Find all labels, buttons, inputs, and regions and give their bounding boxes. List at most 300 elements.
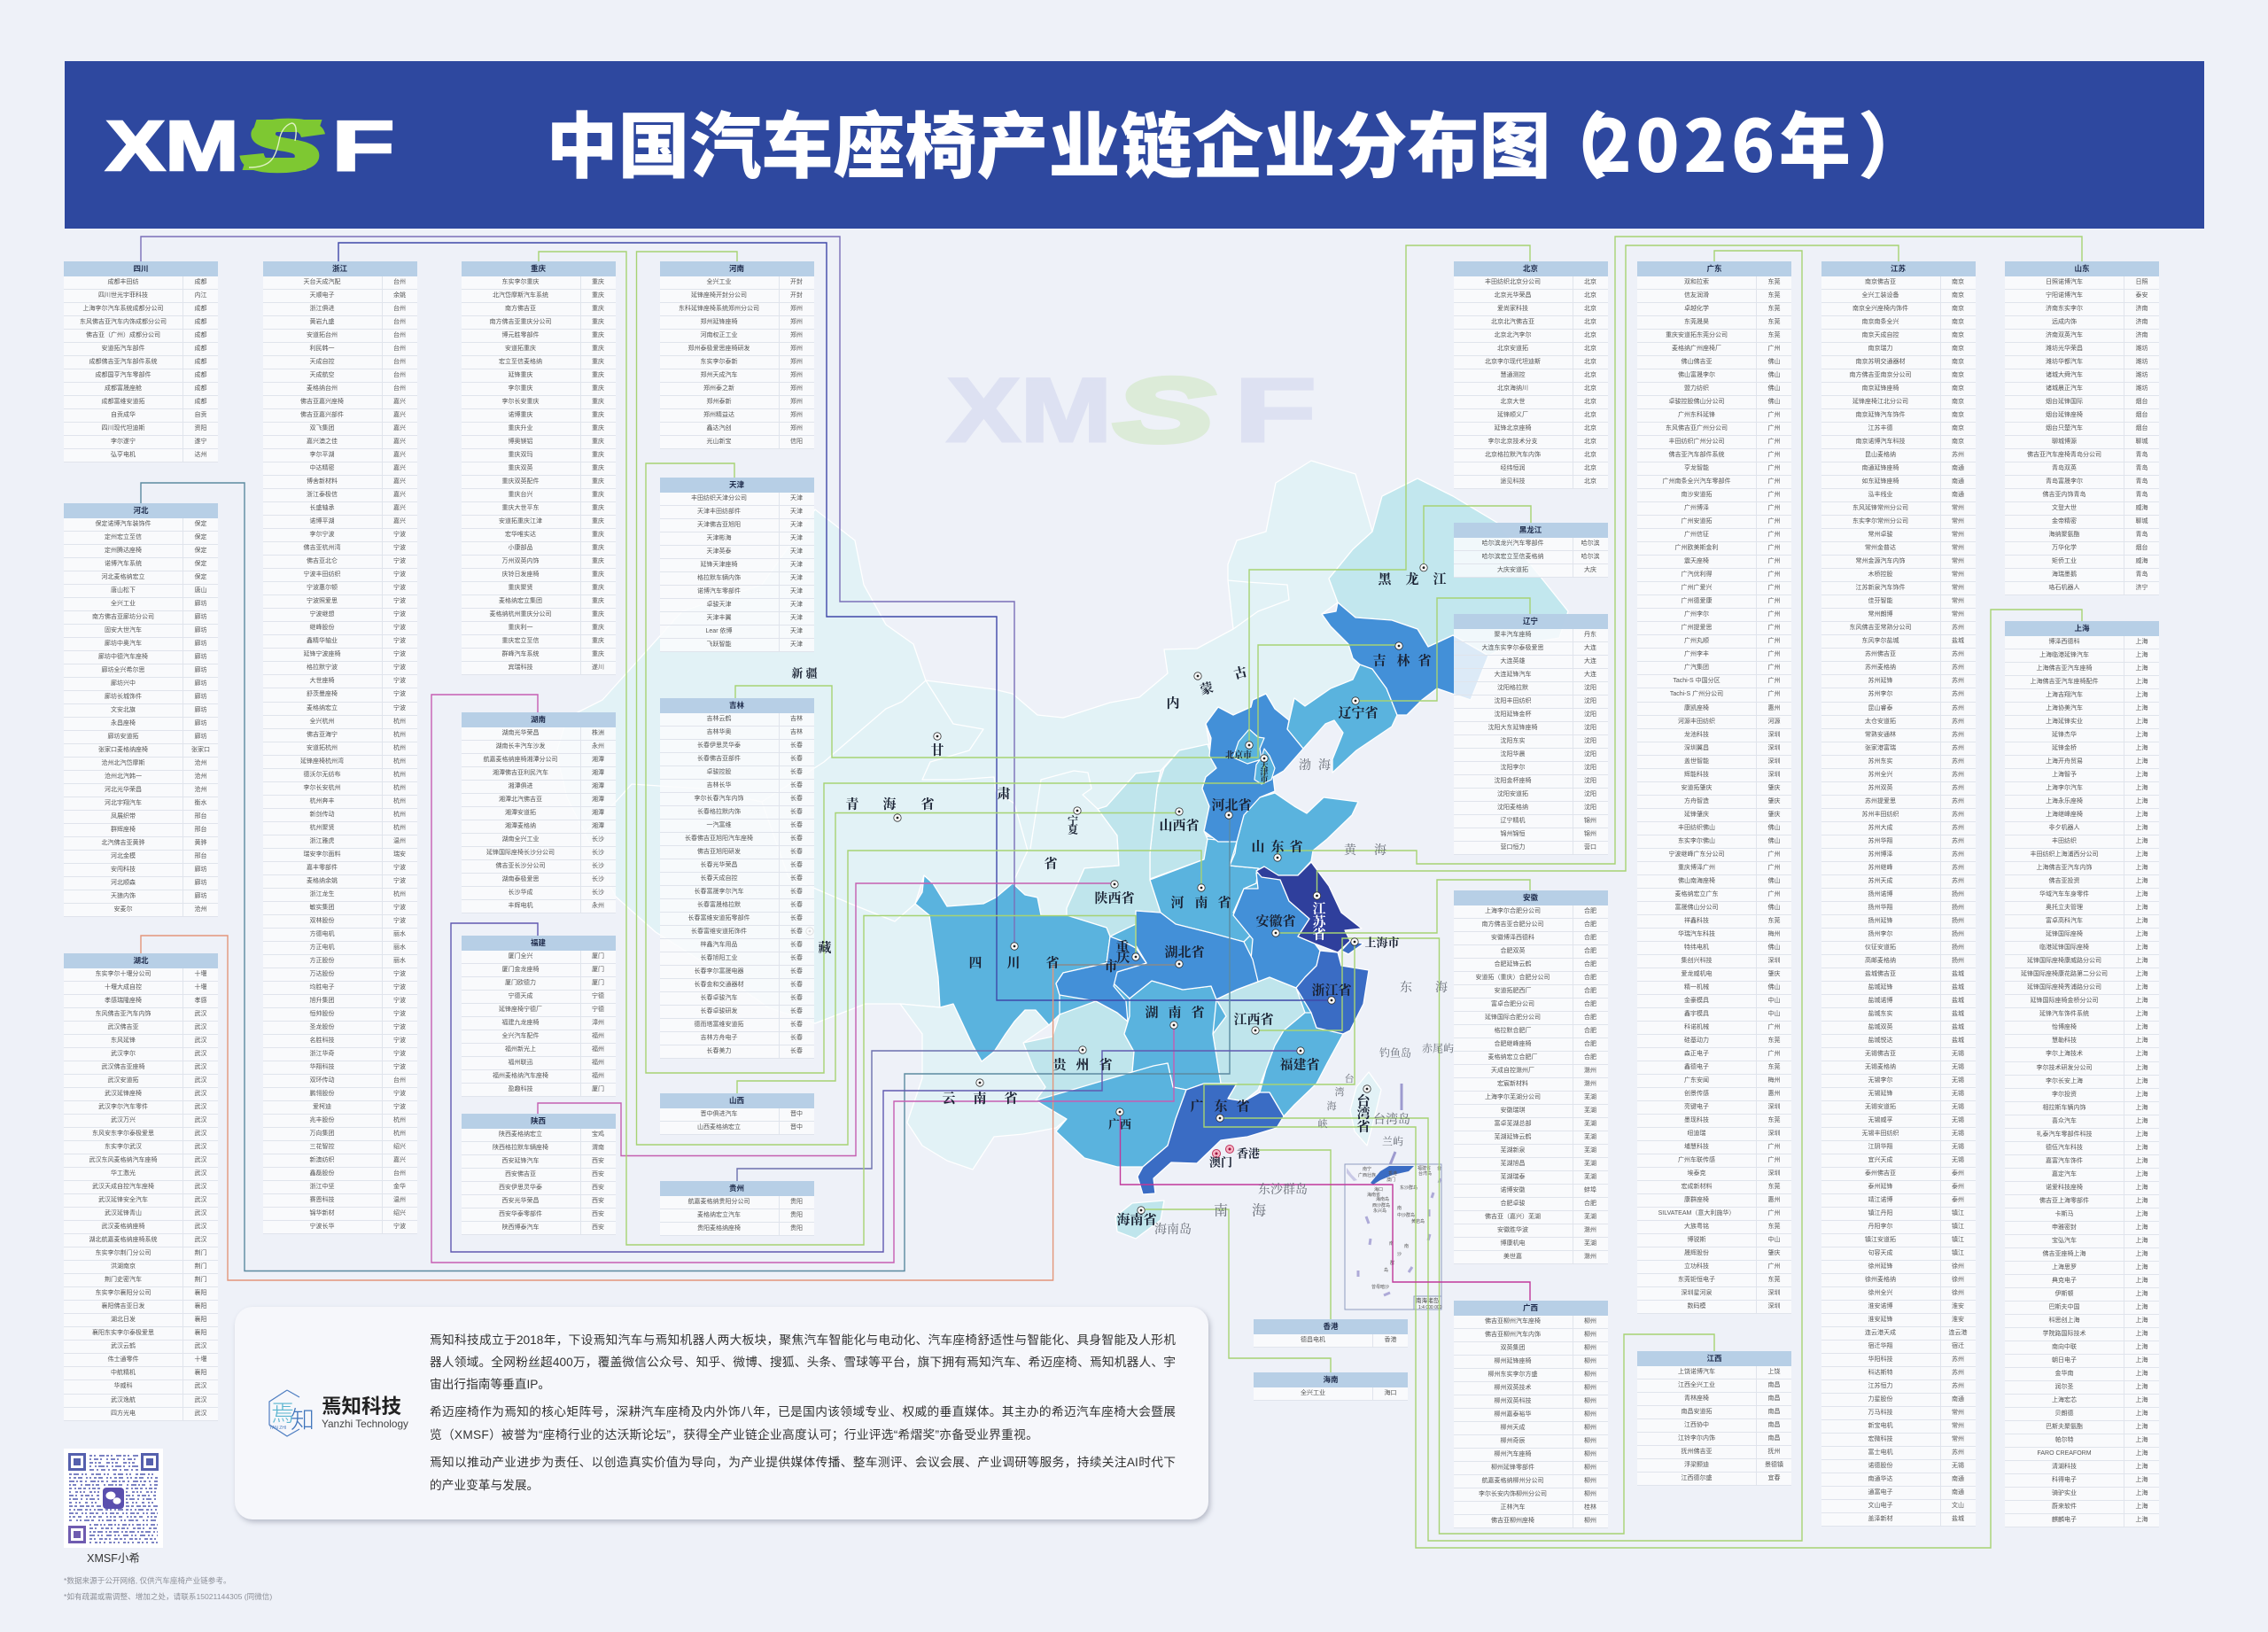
table: Zhejiang: 台州 [393,332,406,338]
table: Jilin: 吉林 [790,716,803,722]
table: Shandong: 潍坊 [2135,385,2148,392]
table: Hebei: 全兴工业 [111,601,136,607]
table: Hubei: 湖北日发 [111,1317,136,1323]
table: Tianjin: 天津 [790,535,803,541]
table: Hebei: 邢台 [195,827,207,833]
table: Beijing: 北京北汽李尔 [1494,332,1531,338]
table: Zhejiang: 杭州 [393,719,406,725]
table: Zhejiang: 杭州 [393,758,406,765]
table: Jiangsu: 佳芬智能 [1868,598,1892,604]
table: Anhui: 合肥 [1584,1014,1596,1021]
table: Guangdong: 佛山 [1768,825,1781,831]
connector: Zhejiang [338,243,1332,1000]
table: Tianjin: 天津 [790,602,803,608]
table: Zhejiang: 万达股份 [310,971,335,977]
table: Chongqing: 重庆 [592,439,604,445]
table: Hubei: 东风安东李尔泰极爱思 [92,1131,154,1137]
table: Jiangsu: 苏州 [1952,865,1964,871]
table: Shanghai: 巴斯夫中国 [2048,1304,2080,1310]
table: Jiangsu: 南京 [1952,332,1964,338]
table: Zhejiang: 宁波 [393,664,406,671]
table: Hubei: 东风佛吉亚汽车内饰 [96,1011,151,1017]
table: Liaoning: 沈阳金杯座椅 [1494,778,1531,784]
table: Chongqing: 宾瑞科技 [509,664,533,671]
table: Fujian: 厦门 [592,953,604,960]
table: Tianjin: 天津佛吉亚旭阳 [697,522,741,528]
table: Zhejiang: 三花智控 [310,1144,335,1150]
sea and island labels: 湾 [1334,1084,1345,1099]
table: Anhui: 合肥延锋云鹤 [1494,961,1531,968]
table: Shandong: 诸城大舜汽车 [2046,372,2083,378]
connector: Jiangxi [1255,938,1714,1534]
table: Jiangsu: 常州 [1952,585,1964,591]
table: Beijing: 北京 [1584,478,1596,485]
table: Guangdong: 麦格纳宏立广东 [1674,891,1719,898]
sea and island labels: 台 [1345,1071,1354,1085]
inset: South China Sea islands: 海南岛 [1376,1196,1389,1202]
table: Hubei: 武汉 [195,1383,207,1389]
inset: South China Sea islands: 东沙群岛 [1400,1185,1418,1191]
table: Chongqing: 重庆升业 [509,425,533,431]
table: Henan: 东科延锋座椅系统郑州分公司 [679,306,759,312]
table: Zhejiang: 嘉兴 [393,518,406,525]
table: Jilin: 佛吉亚旭阳研发 [697,849,741,855]
table: Guangdong: 肇庆 [1768,1250,1781,1256]
table: Shaanxi: 陕西博泰汽车 [501,1224,539,1231]
table: Shanghai: 上海 [2135,891,2148,898]
province labels: 贵 [1052,1054,1068,1074]
table: Jiangsu: 南京佛吉亚 [1865,279,1896,285]
table: Guangdong: 广东 [1706,264,1722,273]
table: Shanghai: 德伍汽车科技 [2046,1145,2083,1151]
province labels: 湖 [1145,1003,1159,1021]
table: Shanxi: 晋中 [790,1124,803,1131]
table: Shanghai: 上海 [2135,1105,2148,1111]
table: Hubei: 东实李尔武汉 [105,1144,142,1150]
connector: Guangxi [1120,1112,1530,1301]
table: Hunan: 长沙华成 [509,890,533,896]
table: Guangdong: 东莞 [1768,292,1781,299]
table: Jiangsu: 苏州 [1952,745,1964,751]
province labels: 广 [1190,1097,1204,1115]
table: Guangxi: 柳州延锋零部件 [1491,1465,1534,1471]
table: Chongqing: 重庆 [592,279,604,285]
table: Tianjin: 延锋天津座椅 [700,562,737,568]
province labels: 川 [1006,953,1021,971]
table: Liaoning: 辽宁精机 [1501,818,1526,824]
table: Guangdong: 广州 [1768,1024,1781,1030]
table: Hunan: 长沙 [592,836,604,843]
table: Henan: 开封 [790,292,803,299]
table: Shandong: 青岛 [2135,465,2148,471]
table: Shanghai: 佛吉亚上海零部件 [2039,1198,2089,1204]
table: Guangdong: 广州 [1768,1210,1781,1216]
table: Shanghai: 润尔圣 [2055,1384,2073,1390]
table: Zhejiang: 台州 [393,1170,406,1177]
sea and island labels: 峡 [1318,1116,1327,1131]
table: Shanghai: 上海 [2135,1278,2148,1284]
table: Guangdong: 信友润滑 [1684,292,1709,299]
province labels: 省 [1045,953,1060,971]
table: Chongqing: 李尔重庆 [509,385,533,392]
table: Guangdong: 深圳 [1768,732,1781,738]
table: Anhui: 芜湖瑞泰 [1501,1174,1526,1180]
table: Hebei: 张家口 [191,747,210,753]
table: Jiangsu: 苏州 [1952,878,1964,884]
table: Anhui: 上海李尔合肥分公司 [1485,908,1541,914]
table: Guangdong: 广州 [1768,452,1781,458]
table: Sichuan: 成都丰田纺 [108,279,138,285]
table: Beijing: 北京光华荣昌 [1494,292,1531,299]
table: Anhui: 芜湖 [1584,1134,1596,1140]
table: Guangdong: 深圳 [1768,745,1781,751]
table: Chongqing: 重庆 [592,651,604,657]
table: Chongqing: 重庆台兴 [509,492,533,498]
table: Guangdong: 东莞 [1768,1277,1781,1283]
table: Guangdong: 爱龙威机电 [1682,971,1712,977]
table: Zhejiang: 杭州 [393,798,406,804]
table: Chongqing: 重庆双英 [509,465,533,471]
table: Hubei [64,953,218,1421]
table: Shanghai: 华域汽车车身零件 [2039,891,2089,898]
table: Shanghai: 上海 [2135,1397,2148,1403]
table: Guangdong: 硅基动力 [1684,1037,1709,1044]
province labels: 陕西省 [1094,888,1135,907]
table: Guangdong: 广州李尔 [1684,611,1709,618]
table: Zhejiang: 方正电机 [310,944,335,951]
table: Anhui: 合肥卓骏 [1501,1201,1526,1207]
table: Hong Kong: 香港 [1384,1337,1396,1343]
table: Zhejiang: 方正股份 [310,958,335,964]
table: Shanghai: 上海 [2135,1477,2148,1483]
table: Chongqing: 重庆 [592,385,604,392]
table: Shanghai: 清湖科技 [2052,1464,2077,1470]
table: Hebei: 廊坊 [195,867,207,873]
table: Guangdong: 富晟佛山分公司 [1674,905,1719,911]
table: Beijing: 北京 [1584,385,1596,392]
table: Beijing: 北京 [1584,412,1596,418]
table: Hubei: 东实李尔荆门分公司 [96,1250,151,1256]
table: Anhui: 天成自控滁州厂 [1491,1068,1534,1074]
table: Zhejiang: 浙江雅虎 [310,838,335,844]
table: Liaoning: 营口恒力 [1501,844,1526,851]
table: Guangdong: 卓骏控股佛山分公司 [1669,399,1724,405]
table: Hubei: 武汉 [195,1011,207,1017]
table: Zhejiang: 杭州 [393,812,406,818]
table: Jilin: 吉林华奥 [707,729,732,735]
table: Shanghai: 丰田纺织 [2052,838,2077,844]
table: Shanxi [659,1093,813,1135]
table: Beijing: 途见科技 [1501,478,1526,485]
table: Sichuan: 四川世光宇菲科技 [98,292,148,299]
table: Shanghai: 上海 [2135,1092,2148,1098]
table: Jiangsu: 淮安 [1952,1317,1964,1323]
table: Zhejiang: 双环传动 [310,1077,335,1084]
table: Jiangsu: 苏州继峰 [1868,865,1892,871]
table: Hunan: 湘潭 [592,797,604,803]
connector: Shaanxi [538,883,1115,1155]
table: Shandong: 青岛双英 [2052,465,2077,471]
table: Zhejiang: 延锋座椅杭州湾 [300,758,344,765]
table: Guangdong: 宏成新材料 [1682,1184,1712,1190]
table: Zhejiang: 台州 [393,1077,406,1084]
table: Jiangsu: 苏州 [1952,785,1964,791]
table: Hubei: 襄阳东实李尔泰极爱思 [92,1330,154,1336]
table: Sichuan: 成都 [195,399,207,405]
table: Jiangsu: 常州 [1952,1410,1964,1416]
province labels: 天 [1260,758,1269,771]
table: Jiangsu: 苏州 [1952,1370,1964,1376]
table: Guangxi: 双英集团 [1501,1345,1526,1351]
table: Shanghai: 上海 [2135,1437,2148,1443]
table: Jiangsu: 南京苏明交通器材 [1855,359,1905,365]
table: Hubei: 武汉李尔 [111,1051,136,1057]
table: Hubei: 武汉 [195,1237,207,1243]
table: Shanghai: 延锋汽车饰件系统 [2039,1011,2089,1017]
table: Beijing: 北京 [1584,399,1596,405]
province labels [791,569,1447,1228]
table: Shanghai: 上海智予 [2052,772,2077,778]
logo: XMSF [105,114,394,176]
table: Shandong: 文登大世 [2052,505,2077,511]
sea and island labels: 赤尾屿 [1422,1040,1454,1056]
province labels: 津 [1260,765,1269,778]
province labels: 宁 [1068,813,1078,828]
table: Hubei: 十堰 [195,984,207,991]
table: Guangdong: 惠州 [1768,1091,1781,1097]
table: Shanghai: 博泽西德科 [2048,639,2080,645]
table: Anhui: 格拉默合肥厂 [1494,1028,1531,1034]
province labels: 州 [1076,1054,1090,1074]
table: Zhejiang: 敏实集团 [310,905,335,911]
table: Jiangsu: 木桥控股 [1868,571,1892,578]
province labels: 山西省 [1159,815,1200,835]
table: Liaoning: 沈阳 [1584,778,1596,784]
inset: South China Sea islands: 南 [1389,1240,1394,1247]
table: Jilin: 长春 [790,756,803,762]
watermark logo [947,360,1317,461]
table: Guangdong: 佛山富晟李尔 [1678,372,1715,378]
table: Jilin: 长春伊思灵华泰 [697,742,741,749]
table: Guangdong: 广州安道拓 [1682,518,1712,525]
table: Guangxi: 柳州 [1584,1411,1596,1418]
table: Tianjin: 格拉默车辆内饰 [697,575,741,581]
table: Jiangsu: 高邮麦格纳 [1865,958,1896,964]
table: Guangdong: 广州 [1768,545,1781,551]
table: Shanghai: 南向中联 [2052,1344,2077,1350]
table: Liaoning: 大连 [1584,658,1596,664]
table: Shanghai: 嘉富汽车饰件 [2046,1158,2083,1164]
table: Hebei: 河北麦格纳宏立 [101,574,145,580]
table: Shaanxi: 西安华泰零部件 [499,1211,542,1217]
connector lines [141,237,2082,1548]
sea dashes near Taiwan [1387,1084,1402,1171]
table: Anhui: 蚌埠 [1584,1187,1596,1193]
table: Guangdong: 鑫德电子 [1684,1064,1709,1070]
table: Guangdong: 龙池科技 [1684,732,1709,738]
table: Sichuan: 李尔遂宁 [111,439,136,445]
main title: 中国汽车座椅产业链企业分布图（2026年） [546,89,1930,193]
table: Zhejiang: 鹏翎股份 [310,1091,335,1097]
table: Henan: 信阳 [790,439,803,445]
table: Hubei: 孝感瑞隆座椅 [105,998,142,1004]
table: Shanghai: 上海佛吉亚汽车内饰 [2036,865,2093,871]
table: Anhui: 芜湖 [1584,1174,1596,1180]
table: Henan: 郑州 [790,425,803,431]
table: Chongqing: 南方佛吉亚 [505,306,536,312]
table: Shandong: 远成内饰 [2052,319,2077,325]
table: Zhejiang: 丽水 [393,931,406,937]
table: Guangxi: 柳州 [1584,1491,1596,1497]
table: Hunan: 湘潭北汽佛吉亚 [499,797,542,803]
table: Jiangsu: 全兴工装设备 [1862,292,1899,299]
table: Hunan: 长沙 [592,876,604,882]
connector: Shanghai [1204,610,2082,1548]
table: Beijing: 北京格拉默汽车内饰 [1485,452,1541,458]
table: Hebei: 廊坊 [195,614,207,620]
connector: Henan [636,252,1201,1145]
table: Jiangsu: 徐州全兴 [1868,1290,1892,1296]
table: Jilin: 长春 [790,1035,803,1041]
table: Sichuan: 弘亨电机 [111,452,136,458]
table: Zhejiang: 天台天成汽配 [303,279,340,285]
table: Guizhou: 航嘉麦格纳贵阳分公司 [687,1199,750,1205]
table: Zhejiang: 宁波 [393,558,406,564]
table: Hebei: 定州腾达座椅 [105,548,142,554]
table: Guangdong: 广州 [1768,691,1781,697]
table: Shandong: 济宁 [2135,585,2148,591]
table: Shandong: 威海 [2135,558,2148,564]
table: Beijing: 北京 [1584,359,1596,365]
table: Zhejiang: 台州 [393,346,406,352]
table: Zhejiang: 宁波 [393,571,406,578]
table: Anhui: 合肥双英 [1501,948,1526,954]
table: Tianjin: 卓骏天津 [707,602,732,608]
table: Hebei: 群辉座椅 [111,827,136,833]
table: Hunan: 湘潭俱进 [509,783,533,789]
table: Anhui: 芜湖旭昌 [1501,1161,1526,1167]
province labels: 庆 [1116,948,1130,966]
table: Hubei: 十堰 [195,971,207,977]
table: Jilin: 长春 [790,968,803,975]
table: Anhui: 合肥 [1584,908,1596,914]
table: Jiangsu: 盐城双英 [1868,1024,1892,1030]
province labels: 南 [1168,1003,1182,1021]
table: Jiangsu: 苏州延锋 [1868,678,1892,684]
table: Zhejiang: 浙江中坚 [310,1184,335,1190]
table: Liaoning: 沈阳丰田纺织 [1494,698,1531,704]
table: Hubei: 武汉云鹤 [111,1343,136,1349]
table: Shanghai: 蔚来软件 [2052,1504,2077,1510]
table: Guangdong: 广州 [1768,891,1781,898]
table: Zhejiang: 绍兴 [393,1210,406,1216]
table: Shanghai: 上海佛吉亚汽车座椅 [2036,665,2093,672]
table: Henan: 郑州 [790,306,803,312]
table: Jiangsu: 南通延锋座椅 [1862,465,1899,471]
table: Henan: 郑州精益达 [703,412,734,418]
table: Hebei: 唐山 [195,587,207,594]
table: Zhejiang: 继峰股份 [310,625,335,631]
province labels: 安徽省 [1255,911,1296,930]
table: Henan: 郑州 [790,346,803,352]
table: Guangdong: 广州 [1768,611,1781,618]
table: Zhejiang: 宁波 [393,611,406,618]
table: Jiangsu: 诺德股份 [1868,1463,1892,1469]
table: Zhejiang: 宁波 [393,998,406,1004]
table: Zhejiang: 延锋宁波座椅 [303,651,340,657]
table: Hainan: 海南 [1323,1375,1338,1384]
company description text: 焉知科技成立于2018年，下设焉知汽车与焉知机器人两大板块，聚焦汽车智能化与电动化、汽车座椅舒适性与智能化、具身智能及人形机 [430,1333,1176,1347]
province labels: 夏 [1068,822,1078,836]
table: Jiangsu: 南京南条全兴 [1862,319,1899,325]
table: Anhui: 富卓合肥分公司 [1491,1001,1534,1007]
table: Sichuan [64,261,218,462]
table: Shanghai: 上海 [2135,785,2148,791]
table: Liaoning: 沈阳 [1584,711,1596,718]
company description text: 览（XMSF）被誉为“座椅行业的达沃斯论坛”，获得全产业链企业高度认可；行业评选“希熠奖”亦备受业界重视。 [430,1428,1038,1442]
table: Chongqing: 宏立至信麦格纳 [499,359,542,365]
table: Sichuan: 资阳 [195,425,207,431]
table: Chongqing: 重庆 [592,625,604,631]
table: Chongqing [461,261,615,675]
table: Guangdong: 东莞 [1768,306,1781,312]
table: Zhejiang: 嘉兴 [393,452,406,458]
table: Guangdong: 广州 [1768,638,1781,644]
table: Guangdong: 广州 [1768,1263,1781,1270]
table: Shanghai: 上海永乐座椅 [2046,798,2083,804]
table: Zhejiang: 安道拓杭州 [307,745,338,751]
table: Zhejiang: 舒茨曼座椅 [307,691,338,697]
table: Guangdong: 双和拉索 [1684,279,1709,285]
table: Jiangsu: 苏州 [1952,772,1964,778]
table: Jiangxi: 江西 [1706,1354,1722,1363]
table: Guangdong: 广州 [1768,518,1781,525]
table: Beijing: 北京北汽佛吉亚 [1491,319,1534,325]
table: Jilin: 长春 [790,782,803,789]
table: Jiangsu: 东实李尔常州分公司 [1852,518,1908,525]
table: Chongqing: 重庆 [592,292,604,299]
table: Sichuan: 成都富维安道拓 [101,399,145,405]
table: Guangdong: 东莞 [1768,1184,1781,1190]
table: Hubei: 襄阳 [195,1317,207,1323]
table: Shanghai: 上海 [2135,1078,2148,1084]
table: Jilin: 长春光华荣昌 [700,862,737,868]
table: Zhejiang: 杭州 [393,785,406,791]
table: Chongqing: 重庆 [592,492,604,498]
table: Jiangsu: 苏州李尔 [1868,691,1892,697]
table: Jilin: 吉林长华 [707,782,732,789]
table: Jiangsu: 徐州 [1952,1277,1964,1283]
table: Guangdong: 佛山 [1768,984,1781,991]
table: Jiangsu: 文山电子 [1868,1503,1892,1509]
table: Guangdong: 麦格纳广州座椅厂 [1672,346,1721,352]
table: Shanghai: 宝弘汽车 [2052,1238,2077,1244]
table: Shanghai: 上海 [2135,758,2148,765]
table: Tianjin: 天津丰翼 [707,615,732,621]
table: Hebei: 河北 [133,506,149,515]
table: Hunan: 湘潭 [592,757,604,763]
table: Hong Kong [1254,1319,1408,1348]
table: Zhejiang: 宁波 [393,1091,406,1097]
connector: Heilongjiang [1424,506,1531,567]
table: Zhejiang: 宁波丰田纺织 [303,571,340,578]
table: Zhejiang: 宁波 [393,971,406,977]
table: Shandong: 日照诺博汽车 [2046,279,2083,285]
table: Zhejiang: 双林股份 [310,918,335,924]
table: Zhejiang: 丽水 [393,944,406,951]
map: Zhejiang, Guangdong, Shanghai [1138,941,1369,1194]
table: Hebei: 廊坊长城饰件 [105,694,142,700]
